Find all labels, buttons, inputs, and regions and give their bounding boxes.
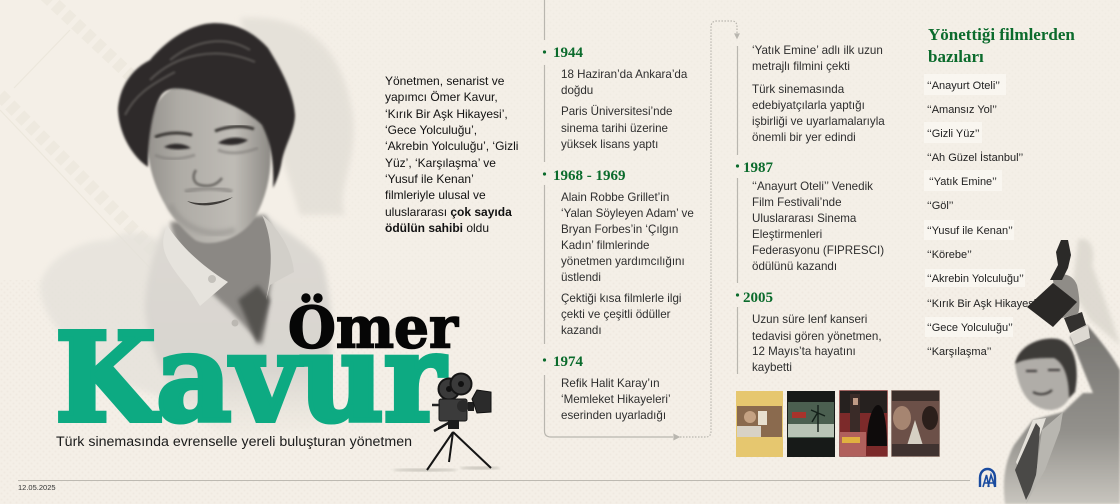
text 1974 continued: Türk sinemasında bbox=[752, 83, 845, 96]
intro text block: uluslararası çok sayıda bbox=[385, 205, 512, 219]
eyes and brows bbox=[155, 127, 254, 137]
trophy base bbox=[1027, 283, 1077, 327]
year 1968-1969: 1968 - 1969 bbox=[553, 168, 626, 184]
name: Ömer: Ömer bbox=[288, 292, 459, 362]
text 1944: doğdu bbox=[561, 84, 593, 97]
text 1968-1969: üstlendi bbox=[561, 271, 601, 284]
poster: Anayurt Oteli bbox=[839, 390, 888, 457]
timeline column 1 bbox=[543, 45, 694, 422]
text 1974: Refik Halit Karay’ın bbox=[561, 377, 660, 390]
text 1968-1969: Kadın’ filmlerinde bbox=[561, 239, 650, 252]
text 2005: tedavisi gören yönetmen, bbox=[752, 330, 882, 343]
text 1974 bbox=[561, 377, 671, 422]
films list: ‘‘Göl’’ bbox=[927, 200, 954, 212]
text 1987: ‘‘Anayurt Oteli’’ Venedik bbox=[752, 180, 873, 193]
text 2005: kaybetti bbox=[752, 361, 792, 374]
shirt and tie bbox=[1016, 418, 1046, 480]
cuff and wrist bbox=[1070, 325, 1090, 345]
text 1968-1969: kazandı bbox=[561, 324, 602, 337]
collar bbox=[163, 225, 228, 306]
photo: Ömer Kavur raising trophy bbox=[1004, 239, 1120, 504]
text 1968-1969 bbox=[561, 191, 694, 337]
intro text block: ‘Akrebin Yolculuğu’, ‘Gizli bbox=[385, 139, 518, 153]
face bbox=[148, 85, 271, 243]
text 1944: sinema tarihi üzerine bbox=[561, 122, 668, 135]
poster: Gece Yolculuğu bbox=[736, 391, 783, 457]
neck bbox=[170, 215, 277, 345]
intro text block: Yönetmen, senarist ve bbox=[385, 74, 505, 88]
raised hand bbox=[1053, 275, 1079, 318]
text 1968-1969: Alain Robbe Grillet’in bbox=[561, 191, 669, 204]
intro text block: filmleriyle ulusal ve bbox=[385, 188, 486, 202]
films list: ‘‘Kırık Bir Aşk Hikayesi’’ bbox=[927, 298, 1041, 310]
nose and mouth bbox=[194, 170, 222, 186]
poster: Akrebin Yolculuğu bbox=[891, 390, 940, 457]
films list: ‘‘Gizli Yüz’’ bbox=[927, 128, 980, 140]
films list: ‘‘Yatık Emine’’ bbox=[929, 176, 997, 188]
intro text block bbox=[385, 74, 518, 235]
text 1974 continued: metrajlı filmini çekti bbox=[752, 60, 850, 73]
text 1968-1969: Çektiği kısa filmlerle ilgi bbox=[561, 292, 681, 305]
watercolor smudge bbox=[40, 232, 170, 400]
text 1944: yüksek lisans yaptı bbox=[561, 138, 658, 151]
name: Kavur: Kavur bbox=[55, 306, 447, 450]
films list: ‘‘Ah Güzel İstanbul’’ bbox=[927, 151, 1023, 164]
text 1974 continued: ‘Yatık Emine’ adlı ilk uzun bbox=[752, 44, 883, 57]
text 1987: Uluslararası Sinema bbox=[752, 212, 857, 225]
text 1987: Federasyonu (FIPRESCI) bbox=[752, 244, 884, 257]
timeline column 2 bbox=[736, 44, 885, 374]
films list: ‘‘Amansız Yol’’ bbox=[927, 104, 997, 116]
icon: film camera on tripod bbox=[393, 374, 500, 472]
intro text block: ‘Yusuf ile Kenan’ bbox=[385, 172, 474, 186]
intro text block: Yüz’, ‘Karşılaşma’ ve bbox=[385, 156, 496, 170]
films list: ‘‘Akrebin Yolculuğu’’ bbox=[927, 273, 1024, 285]
text 1944: Paris Üniversitesi’nde bbox=[561, 105, 672, 118]
heading: films list bbox=[928, 25, 1075, 66]
text 1987: Film Festivali’nde bbox=[752, 196, 842, 209]
year 1987: 1987 bbox=[743, 160, 774, 176]
date: 12.05.2025 bbox=[18, 483, 56, 492]
shadow behind portrait bbox=[240, 18, 354, 215]
films list: ‘‘Yusuf ile Kenan’’ bbox=[927, 225, 1013, 237]
intro text block: ‘Gece Yolculuğu’, bbox=[385, 123, 477, 137]
icon: AA logo bbox=[980, 469, 995, 487]
text 1968-1969: yönetmen yardımcılığını bbox=[561, 255, 685, 268]
text 1974 continued bbox=[752, 44, 885, 144]
heading: films list: bazıları bbox=[928, 47, 984, 66]
text 2005: 12 Mayıs’ta hayatını bbox=[752, 345, 856, 358]
films list bbox=[924, 74, 1041, 358]
films list: ‘‘Gece Yolculuğu’’ bbox=[927, 322, 1013, 334]
shirt bbox=[145, 215, 332, 436]
text 1974 continued: edebiyatçılarla yaptığı bbox=[752, 99, 865, 112]
timeline connector lines bbox=[544, 0, 739, 440]
intro text block: ‘Kırık Bir Aşk Hikayesi’, bbox=[385, 107, 508, 121]
text 1974 continued: işbirliği ve uyarlamalarıyla bbox=[752, 115, 885, 128]
intro text block: yapımcı Ömer Kavur, bbox=[385, 90, 498, 104]
text 1968-1969: ‘Yalan Söyleyen Adam’ ve bbox=[561, 207, 694, 220]
text 1987 bbox=[752, 180, 884, 273]
text 1974 continued: önemli bir yer edindi bbox=[752, 131, 856, 144]
year 1944: 1944 bbox=[553, 45, 584, 61]
statuette bbox=[1050, 240, 1071, 280]
films list: ‘‘Anayurt Oteli’’ bbox=[927, 80, 1000, 92]
text 1987: Eleştirmenleri bbox=[752, 228, 822, 241]
text 1968-1969: Bryan Forbes’in ‘Çılgın bbox=[561, 223, 678, 236]
portrait: Ömer Kavur bbox=[40, 18, 354, 436]
poster: Karşılaşma bbox=[787, 391, 835, 457]
films list: ‘‘Körebe’’ bbox=[927, 249, 972, 261]
hair bbox=[1015, 338, 1077, 398]
suit and arm bbox=[1004, 325, 1120, 504]
year 2005: 2005 bbox=[743, 290, 773, 306]
text 2005 bbox=[752, 313, 882, 374]
films list: ‘‘Karşılaşma’’ bbox=[927, 346, 991, 358]
text 2005: Uzun süre lenf kanseri bbox=[752, 313, 867, 326]
text 1987: ödülünü kazandı bbox=[752, 260, 837, 273]
text 1974: ‘Memleket Hikayeleri’ bbox=[561, 393, 671, 406]
footer rule bbox=[18, 480, 970, 482]
trophy shadow bbox=[1072, 239, 1120, 345]
text 1968-1969: çekti ve çeşitli ödüller bbox=[561, 308, 671, 321]
hair bbox=[118, 23, 295, 188]
eyes and mouth bbox=[1026, 370, 1060, 394]
text 1974: eserinden uyarladığı bbox=[561, 409, 666, 422]
heading: films list: Yönettiği filmlerden bbox=[928, 25, 1075, 44]
year 1974: 1974 bbox=[553, 354, 584, 370]
subtitle: Türk sinemasında evrenselle yereli buluşturan yönetmen bbox=[56, 434, 412, 450]
intro text block: ödülün sahibi oldu bbox=[385, 221, 489, 235]
text 1944: 18 Haziran’da Ankara’da bbox=[561, 68, 688, 81]
text 1944 bbox=[561, 68, 688, 151]
head bbox=[1015, 349, 1075, 410]
film posters bbox=[736, 390, 940, 457]
